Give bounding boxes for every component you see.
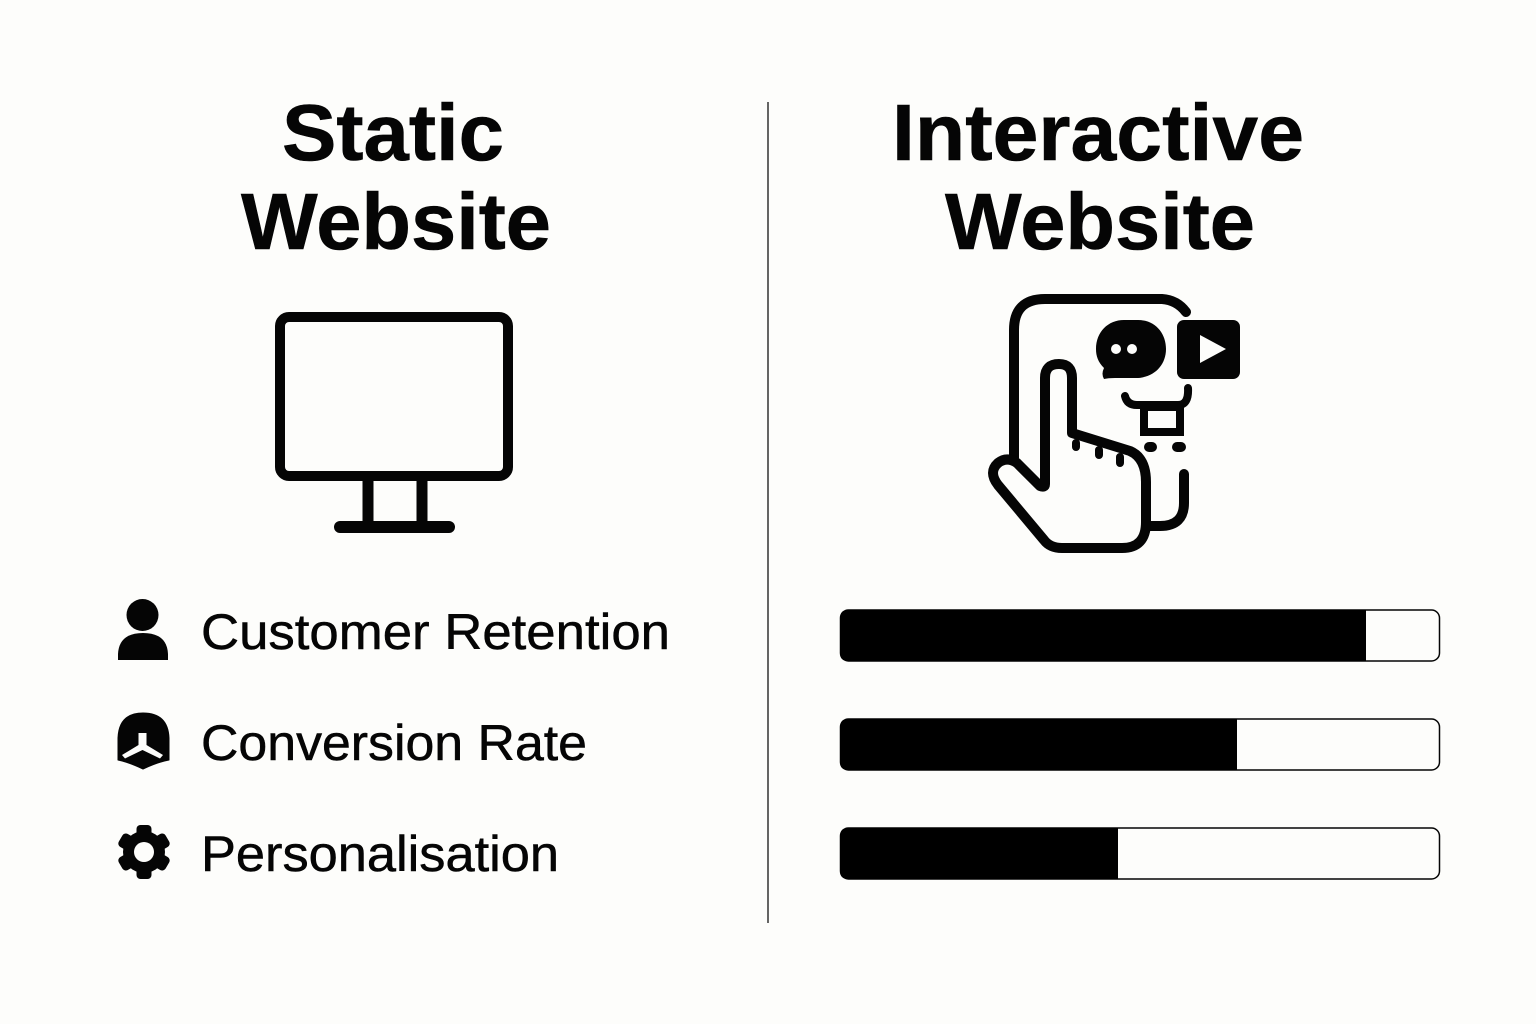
- heading: interactive website: [892, 88, 1304, 266]
- bar: personalisation: [840, 828, 1440, 879]
- tablet outline: [1014, 299, 1186, 458]
- video player: [1177, 320, 1240, 379]
- shopping cart: [1125, 388, 1188, 452]
- metric: conversion rate: Conversion Rate: [201, 715, 587, 771]
- bar: customer retention: [840, 610, 1440, 661]
- metric: personalisation: Personalisation: [201, 826, 559, 882]
- panel: interactive website: [840, 88, 1440, 879]
- bar: conversion rate: [840, 719, 1440, 770]
- heading: interactive website: Website: [945, 177, 1255, 266]
- hand: [993, 364, 1146, 548]
- heading: static website: Static: [282, 88, 504, 177]
- metric: customer retention: Customer Retention: [201, 604, 670, 660]
- icon: conversion badge: [118, 713, 169, 769]
- icon: hand tapping tablet: [993, 299, 1240, 548]
- icon: person: [118, 599, 168, 660]
- heading: interactive website: Interactive: [892, 88, 1304, 177]
- panel: static website: [117, 88, 670, 882]
- heading: static website: Website: [241, 177, 551, 266]
- icon: gear: [117, 825, 171, 879]
- heading: static website: [241, 88, 551, 266]
- icon: desktop monitor: [280, 317, 508, 527]
- chat bubble: [1096, 320, 1166, 379]
